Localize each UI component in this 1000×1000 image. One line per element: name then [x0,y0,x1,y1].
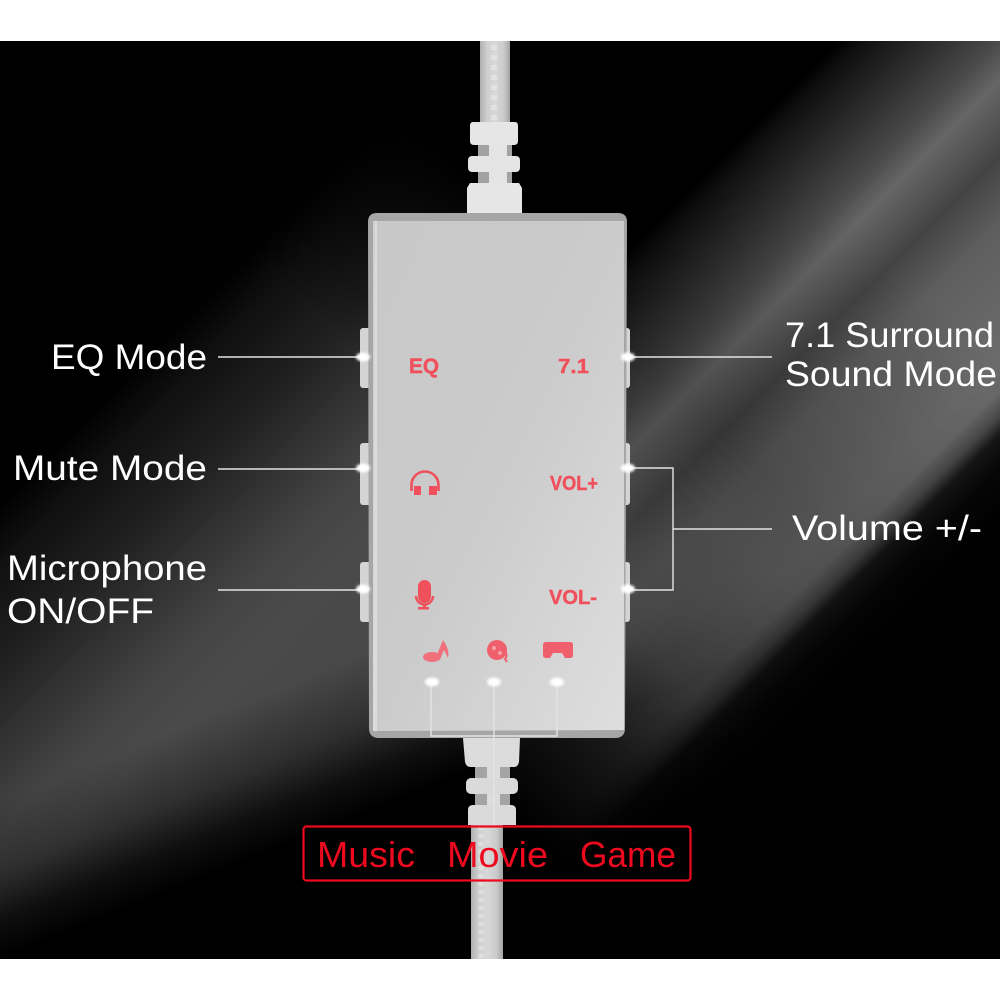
icon: music note [423,640,448,662]
top cable [467,41,522,213]
label: Microphone ON/OFF: Microphone [7,549,207,588]
indicator glows [356,352,635,686]
label: 7.1 Surround Sound Mode: Sound Mode [785,355,997,394]
label: Volume +/-: Volume +/- [792,509,982,548]
icon: movie reel [487,640,507,662]
bottom cable [463,738,520,959]
side buttons [360,328,630,622]
leader lines [218,357,772,826]
mode legend box: Game [580,834,676,875]
icon: microphone [416,580,433,610]
printed labels on box: VOL+ [550,473,598,495]
printed labels on box: VOL- [549,587,597,609]
mode legend box: Movie [447,834,548,875]
mode legend box [304,826,690,880]
printed labels on box: EQ [409,355,439,378]
label: 7.1 Surround Sound Mode: 7.1 Surround [785,316,994,355]
printed labels on box: 7.1 [558,356,589,378]
label: EQ Mode: EQ Mode [51,338,207,377]
printed labels on box [409,355,598,609]
icon: game controller [543,642,573,658]
icon: headphones [412,472,438,495]
control box [368,213,627,738]
mode legend box: Music [317,834,415,875]
label: Mute Mode: Mute Mode [13,449,207,488]
label: Microphone ON/OFF: ON/OFF [7,592,154,631]
